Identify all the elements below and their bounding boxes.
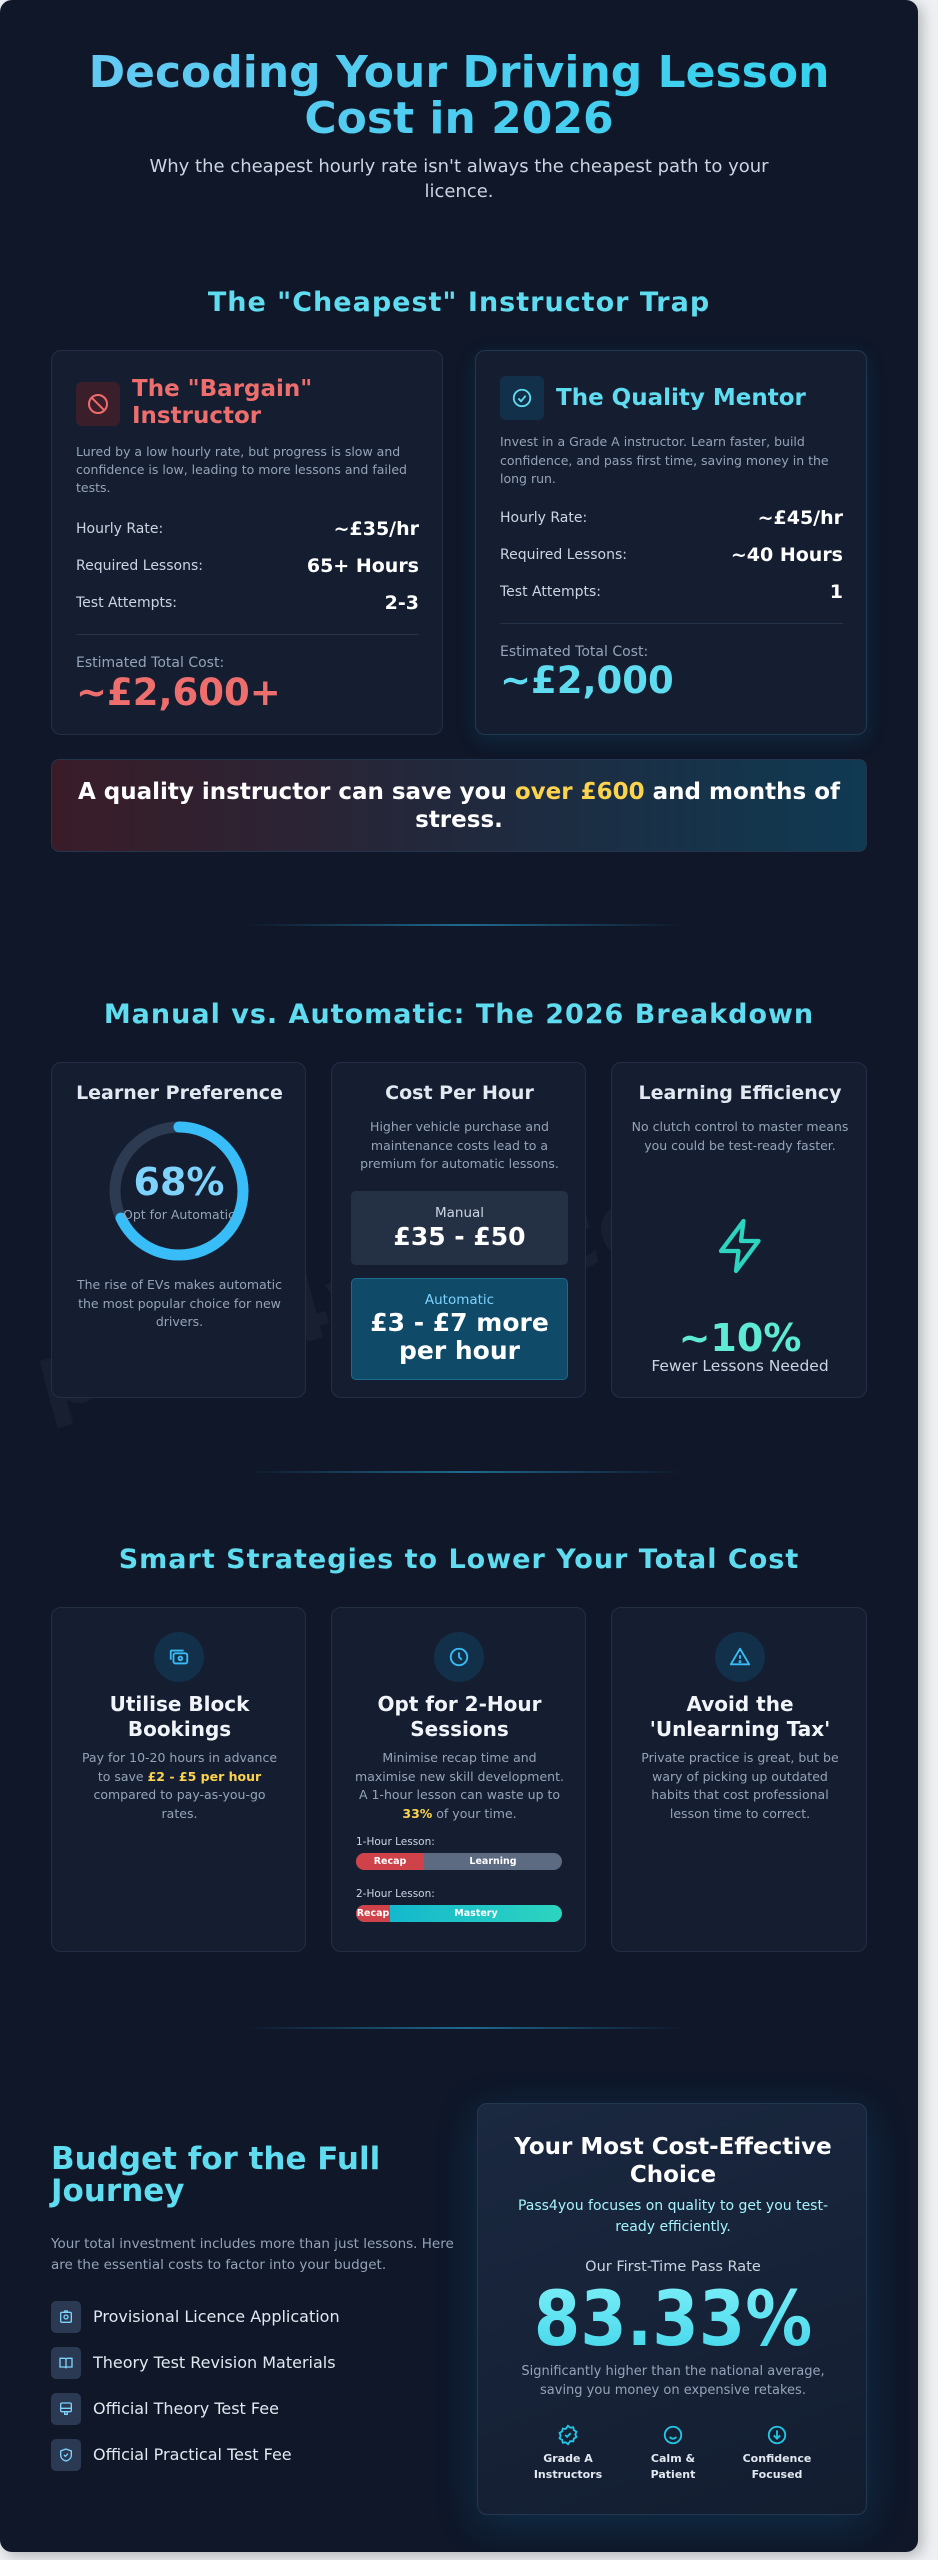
icon: prohibited (76, 382, 120, 426)
heading: 'Unlearning Tax' (650, 1717, 830, 1741)
panel: unlearning tax (611, 1607, 867, 1952)
rows: Test Attempts: (76, 595, 177, 611)
rows: ~£35/hr (334, 518, 419, 540)
feature: confidence (743, 2426, 811, 2481)
chart: donut 68% (110, 1122, 248, 1260)
stat label: Fewer Lessons Needed (651, 1357, 829, 1375)
heading: budget: Budget for the Full (51, 2141, 380, 2177)
total cost bargain: ~£2,600+ (76, 671, 281, 714)
panel: block bookings (51, 1607, 306, 1952)
text: Minimise recap time and maximise new skill development. A 1-hour lesson can waste up to 33% of your time. (355, 1750, 564, 1820)
heading: Learning Efficiency (638, 1082, 841, 1104)
list: theory test fee: Official Theory Test Fee (93, 2399, 279, 2418)
heading: Your Most Cost-Effective (514, 2134, 832, 2160)
heading: budget: Journey (51, 2173, 184, 2209)
text: No clutch control to master means you could be test-ready faster. (632, 1119, 848, 1152)
panel: cost-effective choice (477, 2103, 867, 2515)
rows: ~£45/hr (758, 507, 843, 529)
feature: calm: Calm & (651, 2452, 695, 2465)
list: provisional licence (51, 2301, 340, 2333)
rows (500, 507, 843, 603)
rows: Hourly Rate: (76, 521, 163, 537)
heading: bargain: The "Bargain" (132, 376, 312, 402)
feature: calm: Patient (651, 2468, 695, 2481)
chart: lesson bars: 1-Hour Lesson: (356, 1836, 435, 1848)
title (0, 50, 918, 142)
chart: donut 68%: 68% (134, 1160, 224, 1204)
feature: confidence: Confidence (743, 2452, 811, 2465)
heading: Learner Preference (76, 1082, 283, 1104)
stat: 10%: ~10% (679, 1316, 801, 1360)
heading: bargain (132, 376, 312, 429)
rows: 2-3 (385, 592, 419, 614)
chart: lesson bars: Mastery (454, 1908, 498, 1919)
label: Our First-Time Pass Rate (585, 2259, 761, 2275)
panel: learner preference (51, 1062, 306, 1398)
heading: budget (49, 2141, 380, 2209)
title: Decoding Your Driving Lesson (89, 47, 829, 98)
heading (378, 1692, 542, 1741)
title: Cost in 2026 (304, 93, 614, 144)
heading (514, 2134, 832, 2188)
list: theory materials (51, 2347, 336, 2379)
heading: Utilise Block (110, 1692, 249, 1716)
box: automatic price: per hour (399, 1336, 520, 1365)
text: Higher vehicle purchase and maintenance costs lead to a premium for automatic lessons. (360, 1119, 559, 1171)
chart: lesson bars: Recap (357, 1908, 389, 1919)
text: mentor description: Invest in a Grade A instructor. Learn faster, build confidence, and pass first time, saving money in the long run. (500, 434, 829, 486)
heading: Avoid the (686, 1692, 794, 1716)
icon: check (500, 376, 544, 420)
heading: Opt for 2-Hour (378, 1692, 541, 1716)
subtitle: Why the cheapest hourly rate isn't always the cheapest path to your licence. (149, 156, 769, 202)
rows: Hourly Rate: (500, 510, 587, 526)
icon: money (154, 1632, 204, 1682)
total cost mentor: ~£2,000 (500, 659, 674, 702)
feature: grade a: Instructors (534, 2468, 602, 2481)
watermark: pass4you.co.uk (23, 1121, 828, 1433)
heading: smart strategies: Smart Strategies to Lower Your Total Cost (119, 1544, 799, 1575)
heading: manual vs automatic: Manual vs. Automatic: The 2026 Breakdown (104, 999, 814, 1030)
text: bargain description: Lured by a low hourly rate, but progress is slow and confidence is low, leading to more lessons and failed tests. (76, 444, 407, 495)
chart: lesson bars: Learning (469, 1856, 517, 1867)
chart: lesson bars (356, 1836, 562, 1922)
panel: quality mentor (475, 350, 867, 735)
rows: 1 (830, 581, 843, 603)
callout: savings: A quality instructor can save you over £600 and months of stress. (78, 779, 840, 833)
icon: clock (434, 1632, 484, 1682)
rows: Required Lessons: (76, 558, 203, 574)
rows: ~40 Hours (731, 544, 843, 566)
text: Private practice is great, but be wary of picking up outdated habits that cost professional lesson time to correct. (641, 1750, 839, 1820)
box: automatic price: £3 - £7 more (370, 1308, 549, 1337)
heading: quality mentor: The Quality Mentor (556, 385, 806, 411)
heading: Sessions (410, 1717, 509, 1741)
text: Significantly higher than the national average, saving you money on expensive retakes. (521, 2364, 825, 2398)
panel: bargain instructor (51, 350, 443, 735)
total cost mentor: Estimated Total Cost: (500, 644, 648, 660)
rows: Required Lessons: (500, 547, 627, 563)
text: budget description: Your total investment includes more than just lessons. Here are the essential costs to factor into your budget. (51, 2236, 454, 2273)
box: manual price: £35 - £50 (393, 1222, 526, 1251)
chart: lesson bars: 2-Hour Lesson: (356, 1888, 435, 1900)
feature: calm (651, 2426, 696, 2481)
box: manual price (351, 1191, 568, 1265)
heading: cheapest instructor trap: The "Cheapest" Instructor Trap (208, 287, 710, 318)
panel: 2-hour sessions (331, 1607, 586, 1952)
text: Pass4you focuses on quality to get you test-ready efficiently. (518, 2198, 828, 2235)
box: automatic price: Automatic (425, 1292, 494, 1308)
box: manual price: Manual (435, 1205, 484, 1221)
rows (76, 518, 419, 614)
features (534, 2424, 811, 2481)
feature: confidence: Focused (752, 2468, 802, 2481)
text: Pay for 10-20 hours in advance to save £2 - £5 per hour compared to pay-as-you-go rates. (82, 1750, 277, 1820)
callout: savings (51, 759, 867, 852)
chart: donut 68%: Opt for Automatic (123, 1207, 235, 1222)
list: theory materials: Theory Test Revision Materials (93, 2353, 336, 2372)
stat: 83.33%: 83.33% (534, 2274, 812, 2363)
feature: grade a: Grade A (543, 2452, 593, 2465)
list: practical test fee: Official Practical Test Fee (93, 2445, 292, 2464)
list: provisional licence: Provisional Licence Application (93, 2307, 340, 2326)
list: theory test fee (51, 2393, 279, 2425)
heading: Bookings (128, 1717, 231, 1741)
box: automatic price (351, 1278, 568, 1380)
heading (650, 1692, 830, 1741)
rows: 65+ Hours (307, 555, 419, 577)
heading: Choice (630, 2162, 716, 2188)
panel: learning efficiency (611, 1062, 867, 1398)
total cost bargain: Estimated Total Cost: (76, 655, 224, 671)
list: practical test fee (51, 2439, 292, 2471)
chart: lesson bars: Recap (374, 1856, 406, 1867)
panel: cost per hour (331, 1062, 586, 1398)
heading: Cost Per Hour (385, 1082, 534, 1104)
feature: grade a (534, 2424, 602, 2481)
heading (110, 1692, 250, 1741)
icon: lightning (718, 1218, 761, 1274)
heading: bargain: Instructor (132, 403, 261, 429)
text: The rise of EVs makes automatic the most popular choice for new drivers. (77, 1277, 282, 1329)
icon: warning (715, 1632, 765, 1682)
rows: Test Attempts: (500, 584, 601, 600)
